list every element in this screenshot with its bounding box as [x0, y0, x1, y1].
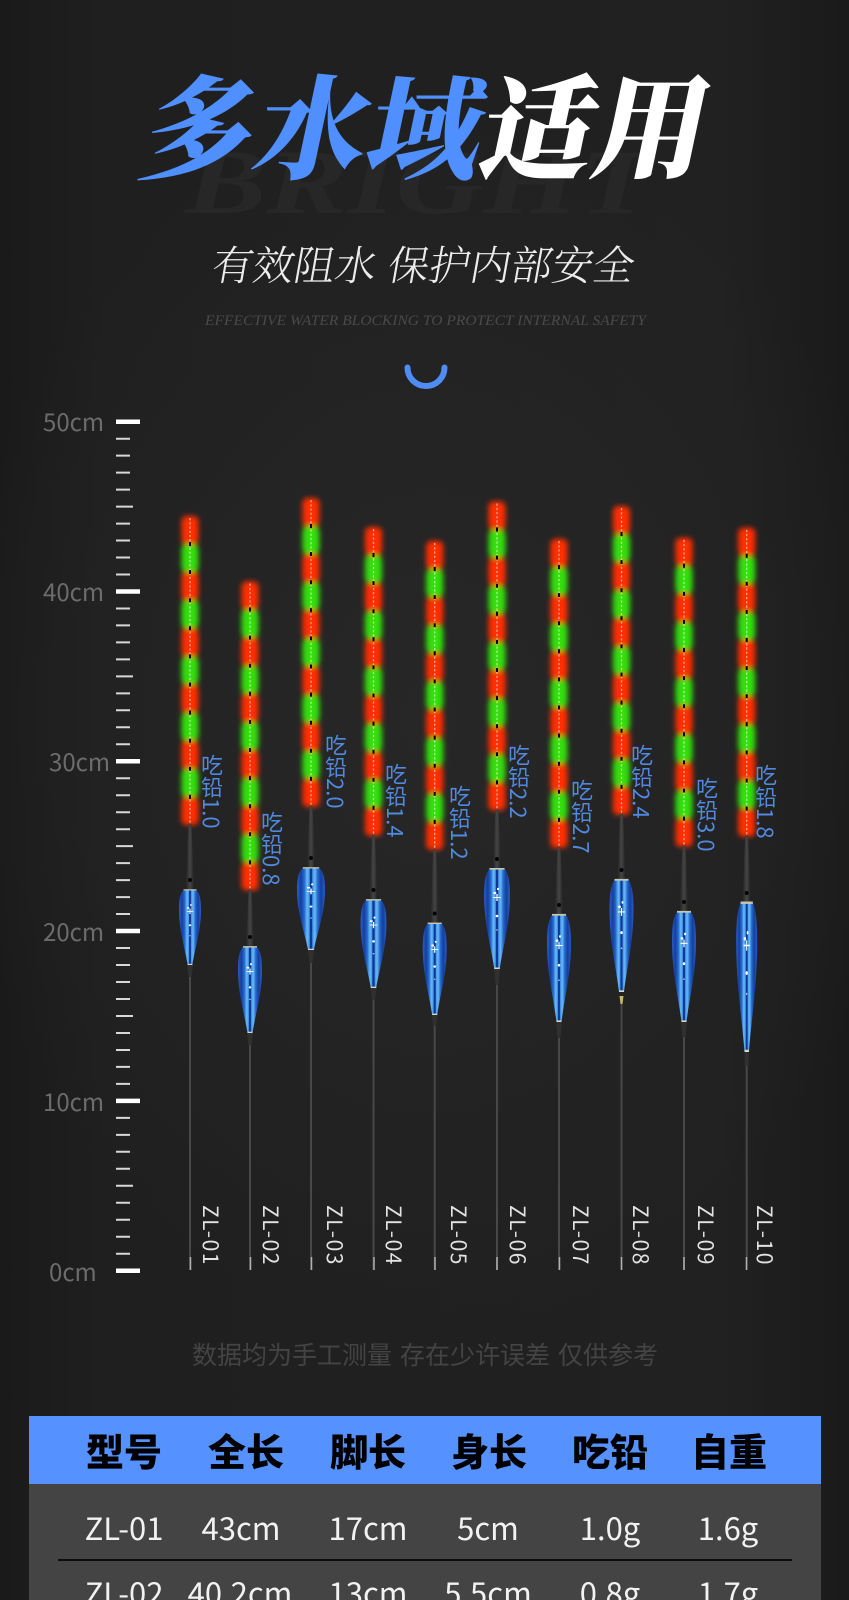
row divider [58, 1559, 792, 1561]
title: 多水域适用 [129, 41, 728, 203]
body [423, 923, 447, 1015]
header: 全长: 全长 [208, 1422, 284, 1477]
ruler label 30cm: 30cm [49, 743, 110, 778]
row 1 model: ZL-01 [85, 1504, 163, 1549]
stem [496, 985, 498, 1270]
subtitle: 有效阻水保护内部安全 [208, 233, 640, 292]
neck tube [492, 810, 502, 869]
neck tube [742, 836, 752, 903]
beads [613, 506, 630, 815]
neck dot [372, 888, 376, 892]
stem [310, 963, 312, 1270]
beads [426, 541, 443, 850]
body [297, 867, 325, 950]
neck dot [557, 903, 561, 907]
float ZL-03 [297, 498, 325, 1270]
float ZL-09 [672, 538, 696, 1270]
stem [620, 1004, 622, 1270]
stub with gold tip [745, 1052, 749, 1066]
beads [365, 527, 382, 836]
table header bar [29, 1416, 821, 1484]
neck dot [745, 891, 749, 895]
ruler scale [116, 420, 140, 1273]
model label ZL-07: ZL-07 [566, 1205, 596, 1266]
row 1 lead: 1.0g [580, 1504, 640, 1549]
body [736, 902, 757, 1052]
body [238, 946, 262, 1033]
neck dot [433, 912, 437, 916]
lead label 3.0: 吃铅3.0 [691, 777, 723, 852]
stem tips [190, 1257, 746, 1270]
model label ZL-05: ZL-05 [444, 1205, 474, 1266]
model label ZL-01: ZL-01 [196, 1205, 226, 1266]
beads [550, 539, 568, 848]
header: 身长: 身长 [451, 1422, 527, 1477]
header: 自重: 自重 [691, 1422, 767, 1477]
lead label 1.4: 吃铅1.4 [380, 763, 412, 838]
beads [242, 582, 258, 890]
neck tube [679, 846, 689, 912]
row 1 weight: 1.6g [698, 1504, 758, 1549]
stub [370, 988, 376, 1000]
ruler label 50cm: 50cm [43, 403, 104, 438]
stem [372, 1000, 374, 1270]
ruler label 20cm: 20cm [43, 913, 104, 948]
beads [302, 498, 320, 807]
lead label 2.2: 吃铅2.2 [503, 744, 535, 819]
lead label 1.0: 吃铅1.0 [196, 754, 228, 829]
float ZL-04 [361, 527, 386, 1270]
stem [683, 1037, 685, 1270]
row 1 body: 5cm [457, 1504, 519, 1549]
stub [681, 1022, 687, 1037]
stem [558, 1038, 560, 1270]
header: 脚长: 脚长 [330, 1422, 406, 1477]
english subtitle: EFFECTIVE WATER BLOCKING TO PROTECT INTERNAL SAFETY [204, 313, 648, 329]
header: 型号: 型号 [86, 1422, 162, 1477]
stub [556, 1022, 562, 1038]
lead label 2.4: 吃铅2.4 [626, 744, 658, 819]
model label ZL-04: ZL-04 [379, 1205, 409, 1266]
ruler label 40cm: 40cm [43, 573, 104, 608]
neck tube [368, 835, 378, 900]
lead label 2.0: 吃铅2.0 [320, 734, 352, 809]
body [547, 914, 571, 1022]
float ZL-05 [423, 541, 447, 1270]
neck tube [616, 814, 626, 880]
neck dot [248, 935, 252, 939]
ruler label 10cm: 10cm [43, 1083, 104, 1118]
icon: blue smile arc [404, 364, 448, 389]
row 1 length: 43cm [202, 1504, 280, 1549]
stem [434, 1026, 436, 1270]
body [484, 868, 510, 969]
gold stub [620, 996, 624, 1004]
model label ZL-03: ZL-03 [320, 1205, 350, 1266]
stub [308, 950, 314, 963]
body [361, 899, 386, 988]
neck dot [188, 878, 192, 882]
stub [494, 969, 500, 985]
model label ZL-10: ZL-10 [750, 1205, 780, 1266]
body [610, 879, 634, 992]
neck tube [185, 824, 195, 890]
lead label 1.8: 吃铅1.8 [750, 764, 782, 839]
float ZL-08 [610, 506, 634, 1270]
body [672, 911, 696, 1022]
neck dot [309, 856, 313, 860]
lead label 1.2: 吃铅1.2 [444, 785, 476, 860]
stub [187, 965, 193, 977]
float ZL-02 [238, 582, 262, 1270]
body [179, 889, 201, 965]
neck tube [306, 806, 316, 868]
model label ZL-09: ZL-09 [691, 1205, 721, 1266]
neck dot [682, 900, 686, 904]
float ZL-06 [484, 502, 510, 1270]
model label ZL-02: ZL-02 [256, 1205, 286, 1266]
beads [738, 528, 755, 837]
beads [488, 502, 506, 810]
stem [746, 1066, 748, 1270]
float ZL-01 [179, 516, 201, 1270]
neck dot [495, 857, 499, 861]
neck tube [430, 849, 440, 924]
beads [676, 538, 692, 847]
stub [432, 1015, 438, 1026]
stub [247, 1033, 253, 1045]
float ZL-10 [736, 528, 757, 1270]
model label ZL-06: ZL-06 [503, 1205, 533, 1266]
ruler label 0cm: 0cm [49, 1253, 97, 1288]
stem [189, 977, 191, 1270]
stem [249, 1045, 251, 1270]
footnote: 数据均为手工测量 存在少许误差 仅供参考 [192, 1336, 658, 1372]
lead label 2.7: 吃铅2.7 [566, 779, 598, 854]
float ZL-07 [547, 539, 571, 1270]
neck tube [554, 847, 564, 915]
model label ZL-08: ZL-08 [626, 1205, 656, 1266]
row 1 foot: 17cm [329, 1504, 407, 1549]
header: 吃铅: 吃铅 [572, 1422, 648, 1477]
beads [182, 516, 198, 825]
panel: specification table [29, 1416, 821, 1600]
neck dot [620, 868, 624, 872]
lead label 0.8: 吃铅0.8 [256, 811, 288, 886]
neck tube [245, 890, 255, 947]
